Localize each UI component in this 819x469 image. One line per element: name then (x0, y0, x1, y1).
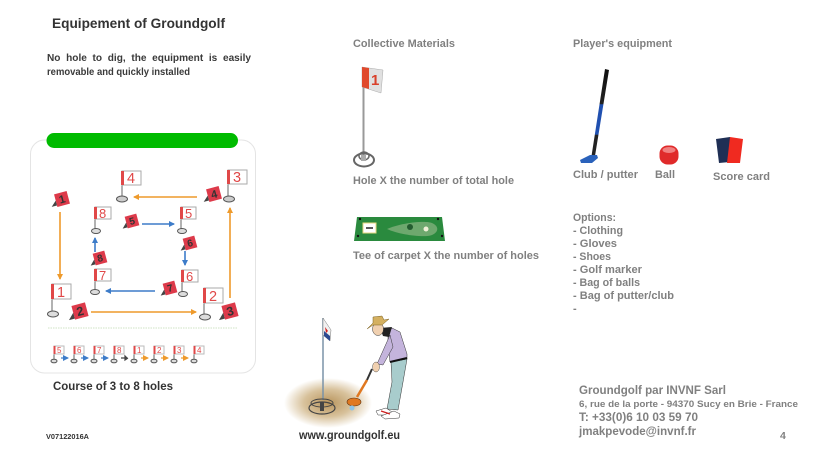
green bar (46, 133, 238, 148)
tee markers: 7 (166, 283, 175, 295)
course caption: Course of 3 to 8 holes (53, 379, 173, 393)
tee markers: 3 (225, 304, 235, 319)
sequence legend: 7 (97, 346, 102, 355)
sequence legend: 8 (117, 346, 122, 355)
icon: club (580, 69, 609, 163)
contact block: T: +33(0)6 10 03 59 70 (579, 410, 698, 424)
intro text: removable and quickly installed (47, 66, 190, 78)
hole caption: Hole X the number of total hole (353, 175, 514, 187)
flags on course: 8 (99, 206, 106, 221)
tee markers (49, 186, 239, 322)
tee markers: 2 (75, 304, 85, 319)
ball caption: Ball (655, 169, 675, 181)
page number: 4 (780, 430, 786, 442)
flags on course: 5 (185, 206, 192, 221)
flags on course: 3 (233, 170, 241, 186)
sequence legend: 2 (157, 346, 162, 355)
flags on course: 2 (209, 289, 217, 305)
sequence legend: 6 (77, 346, 82, 355)
tee caption: Tee of carpet X the number of holes (353, 250, 539, 262)
options list: - Shoes (573, 251, 611, 263)
contact block: Groundgolf par INVNF Sarl (579, 383, 726, 397)
tee markers: 6 (186, 238, 195, 250)
flags on course: 4 (127, 171, 135, 187)
version code: V07122016A (46, 434, 89, 441)
heading: player's equipment: Player's equipment (573, 38, 672, 50)
illustration: golfer putting (284, 316, 407, 428)
title: Equipement of Groundgolf (52, 15, 225, 31)
options list: - (573, 303, 577, 315)
golfer trousers (387, 359, 407, 410)
icon: hole flag (354, 67, 383, 166)
sequence legend (51, 346, 204, 363)
tee markers: 5 (128, 216, 137, 228)
golfer torso (388, 328, 407, 362)
icon: hole flag: 1 (371, 72, 379, 89)
flags on course: 1 (57, 285, 65, 301)
panel: course diagram (30, 133, 256, 373)
flags on course (48, 170, 247, 320)
golfer arm (377, 335, 393, 365)
sequence legend: 3 (177, 346, 182, 355)
contact block (578, 383, 798, 438)
heading: collective materials: Collective Materials (353, 38, 455, 50)
options list: - Golf marker (573, 264, 643, 276)
sequence legend: 1 (137, 346, 142, 355)
intro text (47, 52, 251, 78)
contact block: jmakpevode@invnf.fr (578, 424, 696, 438)
options list: Options: (573, 212, 616, 224)
tee markers: 1 (58, 193, 67, 207)
icon: score cards (716, 137, 743, 163)
tee markers: 4 (210, 188, 220, 202)
tee markers: 8 (96, 253, 105, 265)
score card caption: Score card (713, 171, 770, 183)
flags on course: 7 (99, 268, 106, 283)
website: www.groundgolf.eu (298, 428, 400, 442)
contact block: 6, rue de la porte - 94370 Sucy en Brie - France (579, 399, 798, 410)
icon: tee carpet (354, 217, 445, 241)
sequence legend: 4 (197, 346, 202, 355)
route arrows (60, 197, 230, 312)
options list: - Clothing (573, 225, 623, 237)
club caption: Club / putter (573, 169, 639, 181)
sequence legend: 5 (57, 346, 62, 355)
options list: - Gloves (573, 238, 617, 250)
options list (573, 212, 674, 315)
flags on course: 6 (186, 269, 193, 284)
options list: - Bag of putter/club (573, 290, 674, 302)
options list: - Bag of balls (573, 277, 640, 289)
intro text: No hole to dig, the equipment is easily (47, 52, 251, 64)
icon: ball (660, 146, 678, 164)
